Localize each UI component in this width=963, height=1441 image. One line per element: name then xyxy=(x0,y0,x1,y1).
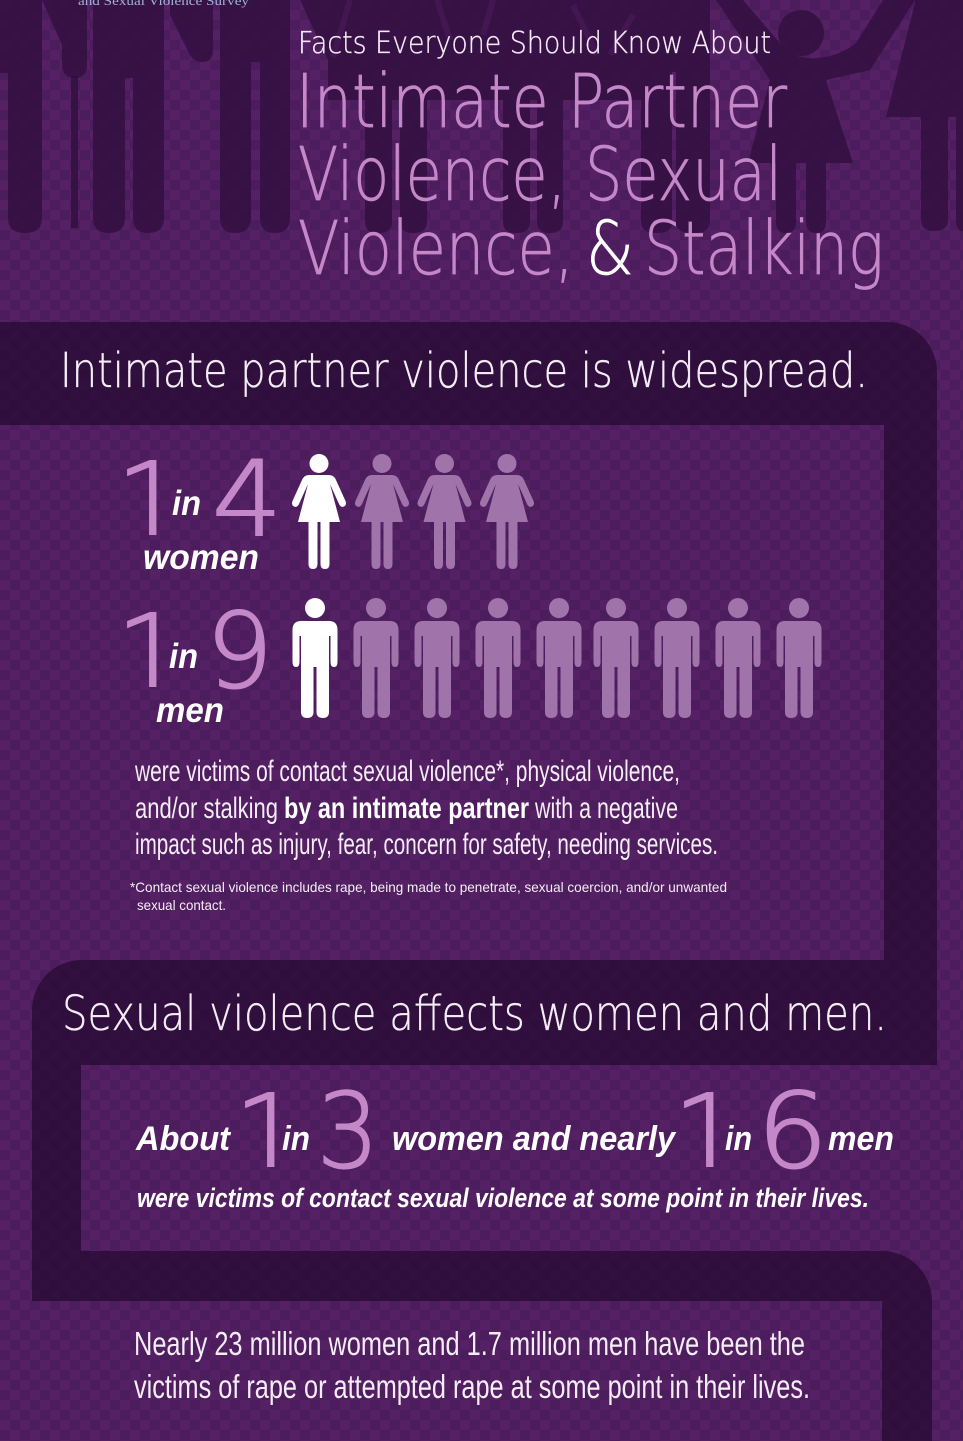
stat: 1 in 9 men xyxy=(127,609,265,722)
explanatory paragraph: impact such as injury, fear, concern for safety, needing services. xyxy=(135,828,718,861)
winding dark band xyxy=(0,322,937,1441)
stat: 1 in 4 women: 1 xyxy=(116,439,186,567)
stat: 1 in 4 women: 4 xyxy=(212,440,282,560)
title line 3: Stalking xyxy=(644,206,884,292)
footnote: *Contact sexual violence includes rape, being made to penetrate, sexual coercion, and/or unwanted xyxy=(130,879,727,895)
icons: women xyxy=(292,454,534,569)
stat: 1 in 4 women xyxy=(127,458,274,570)
explanatory paragraph: and/or stalking xyxy=(135,792,278,825)
explanatory paragraph: by an intimate partner xyxy=(284,792,529,825)
stat: 1 in 3 women and 1 in 6 men: 3 xyxy=(317,1072,379,1192)
explanatory paragraph: with a negative xyxy=(534,792,678,825)
stat: 1 in 9 men: 1 xyxy=(116,591,186,719)
stat: 1 in 4 women: in xyxy=(172,484,201,523)
explanatory paragraph: were victims of contact sexual violence*, physical violence, xyxy=(134,755,680,788)
title kicker: Facts Everyone Should Know About xyxy=(298,26,771,61)
stat: 1 in 9 men: in xyxy=(169,637,198,676)
title line 2: Violence, Sexual xyxy=(298,132,782,218)
title xyxy=(296,26,884,292)
silhouettes of people xyxy=(0,0,963,233)
stat: 1 in 3 women and 1 in 6 men: 1 xyxy=(234,1071,304,1199)
closing statement xyxy=(134,1325,810,1405)
stat: 1 in 9 men: men xyxy=(156,691,224,730)
explanatory paragraph xyxy=(134,755,718,861)
stat: 1 in 3 women and 1 in 6 men: About xyxy=(135,1120,232,1158)
icons: men xyxy=(292,598,822,718)
silhouette arm gaps xyxy=(333,0,633,57)
stat: 1 in 3 women and 1 in 6 men: women and nearly xyxy=(392,1120,677,1158)
stat: 1 in 3 women and 1 in 6 men: 6 xyxy=(757,1072,828,1192)
stat: 1 in 3 women and 1 in 6 men: in xyxy=(282,1120,310,1158)
stat: 1 in 3 women and 1 in 6 men: in xyxy=(725,1120,752,1158)
title line 3: Violence, xyxy=(298,206,574,292)
stat: 1 in 3 women and 1 in 6 men xyxy=(135,1089,893,1212)
footnote: sexual contact. xyxy=(137,897,226,913)
stat: 1 in 3 women and 1 in 6 men: men xyxy=(828,1120,894,1158)
stat: 1 in 9 men: 9 xyxy=(206,592,273,712)
title line 3: & xyxy=(586,206,634,292)
title line 1: Intimate Partner xyxy=(296,59,787,145)
stat: 1 in 4 women: women xyxy=(143,538,259,577)
title line 3 xyxy=(298,206,884,292)
stat: 1 in 3 women and 1 in 6 men: 1 xyxy=(673,1071,743,1199)
footnote xyxy=(130,879,727,913)
